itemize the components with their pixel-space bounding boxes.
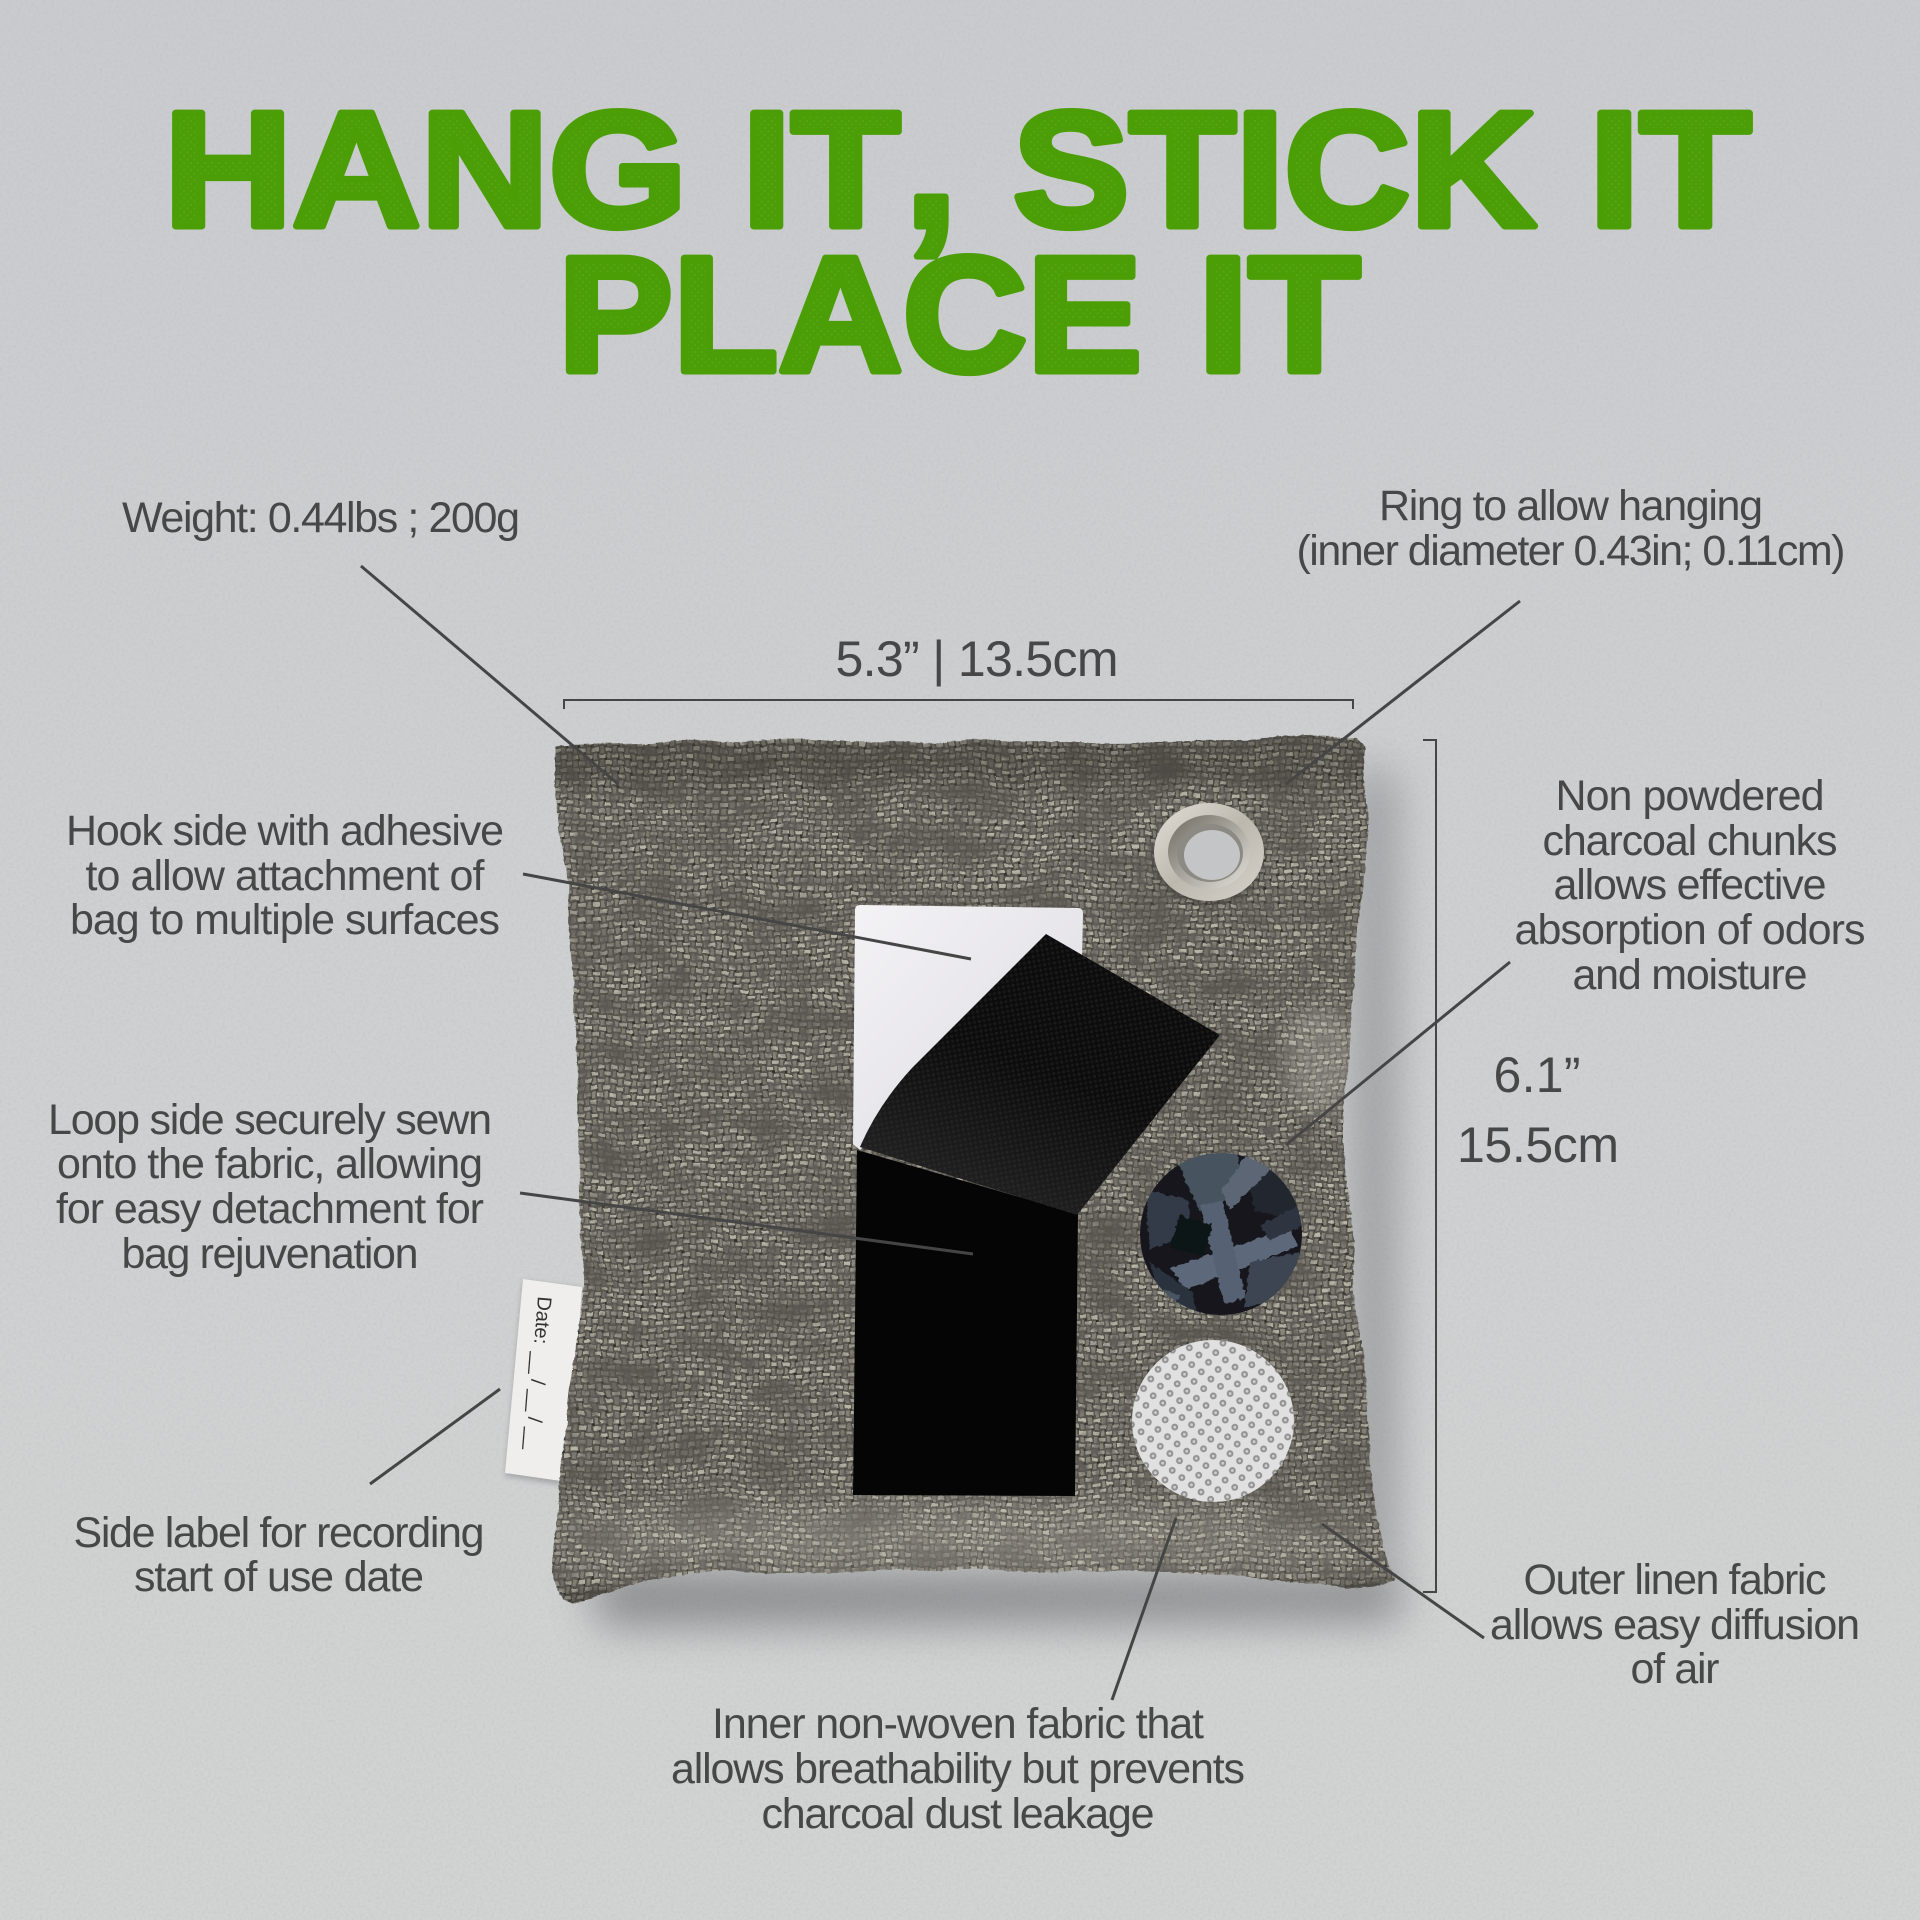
- text: ring: [1296, 482, 1846, 575]
- text: hook side: bag to multiple surfaces: [70, 896, 500, 944]
- line: charcoal: [1286, 962, 1510, 1145]
- text: hook side: to allow attachment of: [86, 852, 486, 900]
- text: ring: (inner diameter 0.43in; 0.11cm): [1296, 527, 1846, 575]
- title word: HANG: HANG: [164, 78, 687, 261]
- text: inner fabric: [671, 1700, 1245, 1838]
- callout lines: [361, 566, 1520, 1700]
- text: charcoal: and moisture: [1572, 951, 1808, 999]
- peeled hook velcro strip: [860, 934, 1220, 1215]
- text: loop side: onto the fabric, allowing: [57, 1140, 483, 1188]
- title word: PLACE: PLACE: [558, 223, 1142, 406]
- text: hook side: Hook side with adhesive: [66, 807, 504, 855]
- text: weight: Weight: 0.44lbs ; 200g: [122, 494, 520, 542]
- text: loop side: bag rejuvenation: [122, 1230, 418, 1278]
- text: charcoal: Non powdered: [1556, 772, 1824, 820]
- text: inner fabric: charcoal dust leakage: [762, 1790, 1154, 1838]
- height label: 15.5cm: [1457, 1117, 1619, 1173]
- text: hook side: [66, 807, 504, 944]
- height label: [1457, 1047, 1619, 1173]
- metal ring eyelet: [1153, 803, 1265, 906]
- white adhesive backing paper: [853, 905, 1083, 1150]
- title comma: ,: [904, 50, 958, 268]
- title word: IT: IT: [1198, 223, 1360, 406]
- height dimension bracket: [1423, 740, 1436, 1592]
- text: loop side: Loop side securely sewn: [48, 1096, 492, 1144]
- text: ring: Ring to allow hanging: [1379, 482, 1763, 530]
- text: loop side: [48, 1096, 492, 1278]
- loop velcro strip sewn on the bag: [853, 1150, 1078, 1496]
- text: outer fabric: of air: [1630, 1645, 1720, 1693]
- text: side label: [74, 1509, 484, 1601]
- charcoal chunks circle: [1140, 1153, 1302, 1315]
- title word: STICK: STICK: [1013, 78, 1536, 261]
- bag shadow: [590, 760, 1400, 1625]
- line: side label: [370, 1389, 500, 1484]
- text: charcoal: allows effective: [1554, 861, 1826, 909]
- line: loop side: [520, 1193, 973, 1254]
- width dimension bracket: [564, 700, 1353, 709]
- side date label: [505, 1279, 582, 1486]
- text: outer fabric: allows easy diffusion: [1490, 1601, 1860, 1649]
- text: charcoal: charcoal chunks: [1542, 817, 1838, 865]
- text: charcoal: absorption of odors: [1514, 906, 1866, 954]
- text: side label: start of use date: [134, 1553, 424, 1601]
- title word: IT,: IT: [742, 78, 900, 261]
- text: outer fabric: [1490, 1556, 1860, 1693]
- title: [164, 50, 1751, 406]
- linen fabric: [530, 720, 1410, 1620]
- inner non-woven fabric circle: [1132, 1340, 1294, 1502]
- width label: 5.3” | 13.5cm: [836, 631, 1118, 687]
- line: inner fabric: [1112, 1518, 1176, 1700]
- text: outer fabric: Outer linen fabric: [1524, 1556, 1826, 1604]
- text: loop side: for easy detachment for: [56, 1185, 484, 1233]
- text: inner fabric: Inner non-woven fabric that: [712, 1700, 1204, 1748]
- line: outer fabric: [1322, 1524, 1484, 1638]
- text: side label: Side label for recording: [74, 1509, 484, 1557]
- text: charcoal: [1514, 772, 1866, 999]
- product: charcoal bag: [505, 720, 1410, 1625]
- line: hook side: [523, 874, 971, 959]
- side date label: Date: __ / __ / __: [521, 1296, 555, 1451]
- height label: 6.1”: [1494, 1047, 1580, 1103]
- text: inner fabric: allows breathability but prevents: [671, 1745, 1245, 1793]
- line: weight: [361, 566, 618, 784]
- title word: IT: IT: [1589, 78, 1751, 261]
- line: ring: [1286, 601, 1520, 784]
